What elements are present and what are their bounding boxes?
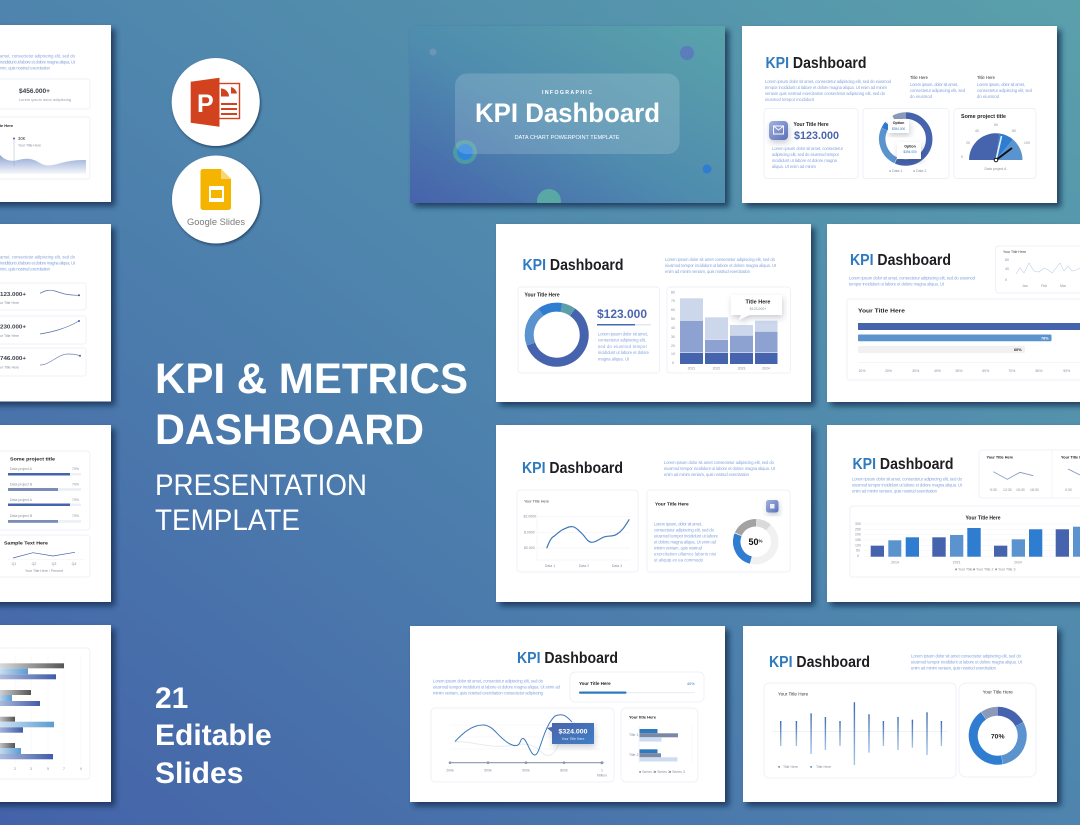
card: horizontal bars: ■ Series 2 xyxy=(654,770,670,774)
card: gradient bar chart: 9 xyxy=(80,767,82,771)
slide: KPI dashboard with gauge xyxy=(742,26,1057,203)
slide title: KPI Dashboard xyxy=(522,460,623,477)
intro text: eiusmod tempor incididunt ut labore et dolore magna aliqua. Ut enim ad xyxy=(433,684,561,690)
card: 50% donut: exercitation ullamco laboris nisi xyxy=(654,552,716,556)
card: grouped bars: 2014 xyxy=(891,560,899,564)
intro text xyxy=(765,79,892,102)
card: project bars: 70% xyxy=(72,467,79,471)
card: project bars xyxy=(0,451,90,530)
intro text: Lorem ipsum dolor sit amet, consectetur adipiscing elit, sed do xyxy=(852,476,963,482)
slide: curve with tooltip xyxy=(410,626,725,802)
card: donut: consectetur adipiscing elit, xyxy=(598,338,646,342)
card: sample line chart: Q1 xyxy=(12,562,16,566)
intro text: eiusmod tempor incididunt ut labore et dolore magna aliqua. Ut xyxy=(665,263,777,268)
card: grouped bars: 200 xyxy=(855,533,861,537)
card: gradient bar chart: 2 xyxy=(14,767,16,771)
card: 50% donut: consectetur adipiscing elit, sed do xyxy=(654,528,715,532)
intro text: nim, quis nostrud exercitation xyxy=(0,266,51,272)
card: grouped bars: 2024 xyxy=(1014,560,1022,564)
card: line chart: Data 3 xyxy=(612,564,622,568)
chart tooltip: Title Here xyxy=(746,300,770,306)
slide: vertical bars and 70% donut xyxy=(743,626,1057,802)
intro text: enim ad minim veniam, quis nostrud exercitation xyxy=(664,472,750,477)
card: stacked bar chart: 50 xyxy=(671,317,675,321)
card: stacked bar chart: 60 xyxy=(671,308,675,312)
card: area curves: 800k xyxy=(560,768,568,772)
card: 50% donut xyxy=(647,490,790,572)
tooltip: Your Title Here xyxy=(561,737,585,741)
slide: left column project progress xyxy=(0,425,111,602)
column notes: Lorem ipsum, dolor sit amet, xyxy=(977,82,1025,87)
card: grouped bars: 0 xyxy=(857,554,859,558)
tooltip xyxy=(547,723,594,744)
intro text: amet, consectetur adipiscing elit, sed do xyxy=(0,54,76,58)
card: sample line chart: Your Title Here / Percent xyxy=(25,569,63,573)
card: gauge xyxy=(954,108,1036,178)
card: 70% donut xyxy=(959,683,1036,777)
mini line chart card: 80 xyxy=(1005,258,1009,262)
card: value with icon: aliqua. Ut enim ad minim xyxy=(772,164,816,169)
card: grouped bars: 300 xyxy=(855,522,861,526)
card: gradient bar chart xyxy=(0,648,90,779)
card: area curves: 500k xyxy=(484,768,492,772)
intro text: minim veniam, quis nostrud exercitation consectetur adipiscing xyxy=(433,690,544,696)
card: gauge: 20 xyxy=(966,141,970,145)
slide title: KPI Dashboard xyxy=(766,55,866,72)
slide: left column sparklines xyxy=(0,224,111,402)
intro text: Lorem ipsum dolor sit amet, consectetur adipiscing elit, sed do eiusmod xyxy=(849,276,976,280)
card: donut with option tooltips: ● Data 1 xyxy=(889,169,902,173)
icon: PowerPoint badge xyxy=(172,58,260,146)
intro text xyxy=(433,678,561,696)
intro text: incididunt ut labore et dolore magna aliqua. Ut xyxy=(0,260,76,266)
card: project bars: Data project B xyxy=(10,482,33,486)
column notes: Lorem ipsum, dolor sit amet, xyxy=(910,82,958,87)
KPI row 3: 746.000+ xyxy=(0,356,27,362)
card: gauge: 0 xyxy=(961,155,963,159)
icon: Google Slides badge: Google Slides xyxy=(187,217,245,228)
card: grouped bars xyxy=(850,506,1080,577)
card: 50% donut: 50 xyxy=(748,537,758,547)
card: grouped bars: 150 xyxy=(855,538,861,542)
heading: KPI & Metrics Dashboard: DASHBOARD xyxy=(155,406,424,454)
intro text xyxy=(911,654,1023,670)
card: progress bars: 80% xyxy=(1035,369,1043,373)
card: sample line chart: Sample Text Here xyxy=(4,540,48,546)
mini line chart card: Your Title Here xyxy=(1003,250,1026,254)
intro text: tempor incididunt ut labore et dolore magna aliqua. Ut xyxy=(849,282,945,286)
slide title: KPI Dashboard xyxy=(517,650,618,667)
mini line chart card: Mar xyxy=(1060,284,1067,288)
mini line chart card: Feb xyxy=(1041,284,1047,288)
card: wave chart: Your Title Here xyxy=(18,144,41,148)
card: vertical range bars: Title Here xyxy=(783,765,798,769)
card: vertical range bars xyxy=(764,683,956,778)
card: area curves xyxy=(431,708,614,782)
card: wave chart xyxy=(0,117,90,179)
intro text: eiusmod tempor incididunt ut labore et dolore magna aliqua. Ut xyxy=(852,482,963,488)
card: progress: 40% xyxy=(687,682,695,686)
KPI row 3 xyxy=(0,348,86,376)
card: stacked bar chart: 30 xyxy=(671,335,675,339)
column notes: do eiusmod xyxy=(910,94,933,99)
column notes: consectetur adipiscing elit, sed xyxy=(977,88,1033,93)
intro text: amet, consectetur adipiscing elit, sed do xyxy=(0,254,76,260)
card: area curves: 200k xyxy=(446,768,454,772)
cover title: INFOGRAPHIC xyxy=(542,90,592,96)
card: grouped bars: ■ Your Title 3 xyxy=(995,568,1015,572)
cover title: KPI Dashboard xyxy=(475,98,660,128)
card: donut with option tooltips: Option xyxy=(893,121,904,125)
card: donut with option tooltips xyxy=(863,107,949,178)
card: stacked bar chart: 2023 xyxy=(738,366,745,370)
card: donut: $123.000 xyxy=(597,307,647,321)
card: progress bars: 30% xyxy=(912,369,919,373)
card: grouped bars: Your Title Here xyxy=(965,516,1001,522)
mini line chart cards: 12:30 xyxy=(1003,488,1012,492)
icon: PowerPoint badge: P xyxy=(197,90,214,118)
subheading: presentation template: TEMPLATE xyxy=(155,504,300,537)
card: horizontal bars xyxy=(621,708,698,782)
card: grouped bars: ■ Your Title xyxy=(955,568,973,572)
column notes: do eiusmod xyxy=(977,94,1000,99)
mini line chart cards: Your Title Here xyxy=(986,456,1013,460)
card: line chart xyxy=(517,490,638,572)
card: line chart: Data 2 xyxy=(579,564,589,568)
subheading: presentation template: PRESENTATION xyxy=(155,469,367,502)
card: progress: Your Title Here xyxy=(579,681,611,686)
card: value with icon xyxy=(764,108,858,178)
slide title: KPI Dashboard xyxy=(852,456,954,473)
intro text xyxy=(0,254,76,272)
column notes: Title Here xyxy=(977,75,996,80)
intro text: eiusmod tempor incididunt ut labore et dolore magna aliqua. Ut xyxy=(664,466,776,471)
card: gradient bar chart: 7 xyxy=(63,767,65,771)
card: value: $456.000+ xyxy=(19,88,50,95)
slide: line chart and 50% donut xyxy=(496,425,811,602)
card: donut: Your Title Here xyxy=(524,292,560,298)
card: grouped bars: 250 xyxy=(855,527,861,531)
card: stacked bar chart xyxy=(667,287,790,373)
card: value with icon: adipiscing elit, sed do eiusmod tempor xyxy=(772,152,840,157)
card: gauge: 80 xyxy=(1012,129,1016,133)
cover title: DATA CHART POWERPOINT TEMPLATE xyxy=(514,135,620,141)
card: project bars: Data project B xyxy=(10,514,33,518)
chart tooltip xyxy=(731,295,782,320)
slide: donut and stacked bars xyxy=(496,224,811,402)
card: 70% donut: Your Title Here xyxy=(983,690,1013,694)
card: 50% donut: minim veniam, quis nostrud xyxy=(654,546,703,550)
card: progress bars: 70% xyxy=(1008,369,1015,373)
card: donut: Lorem ipsum dolor sit amet, xyxy=(598,332,648,336)
text: 21 editable slides: 21 xyxy=(155,682,188,715)
card: 50% donut: et dolore magna aliqua. Ut enim ad xyxy=(654,540,717,544)
card: project bars: Data project A xyxy=(10,467,33,471)
card: 50% donut: Your Title Here xyxy=(655,502,689,508)
card: donut with option tooltips: Option xyxy=(904,144,916,148)
slide title: KPI Dashboard xyxy=(769,654,870,671)
cover glass panel xyxy=(455,74,680,154)
card: wave chart: 30K xyxy=(18,136,26,141)
intro text xyxy=(664,460,776,477)
card: progress xyxy=(570,672,704,702)
card: gradient bar chart: 5 xyxy=(47,767,49,771)
mini line chart cards: 15:30 xyxy=(1016,488,1025,492)
mini line chart cards: 9:30 xyxy=(1065,488,1072,492)
card: project bars: 70% xyxy=(72,498,79,502)
card: progress bars: 60% xyxy=(1014,348,1022,352)
slide title: KPI Dashboard xyxy=(522,257,624,274)
card: progress bars: 20% xyxy=(885,369,892,373)
card: donut with option tooltips: $394.000 xyxy=(892,127,905,131)
text: 21 editable slides: Editable xyxy=(155,719,272,752)
column notes xyxy=(910,75,1033,99)
intro text: Lorem ipsum dolor sit amet consectetur adipiscing elit, sed do xyxy=(665,257,776,262)
card: progress bars: 10% xyxy=(858,369,866,373)
card: grouped bars: 50 xyxy=(856,549,860,553)
card: 50% donut: Lorem ipsum, dolor sit amet, xyxy=(654,522,702,526)
card: donut xyxy=(518,287,660,373)
card: progress bars xyxy=(847,299,1080,380)
mini line chart cards: 9:30 xyxy=(990,488,997,492)
card: gauge: 100 xyxy=(1024,141,1030,145)
card: donut with option tooltips: $394.000 xyxy=(903,150,917,154)
card: stacked bar chart: 80 xyxy=(671,290,675,294)
card: value xyxy=(0,79,90,109)
mini line chart card: Jan xyxy=(1022,284,1028,288)
intro text xyxy=(0,54,76,70)
card: stacked bar chart: 10 xyxy=(671,352,675,356)
column notes: Title Here xyxy=(910,75,929,80)
card: 70% donut: 70% xyxy=(991,734,1005,740)
KPI row 2: 230.000+ xyxy=(0,324,27,330)
intro text: Lorem ipsum dolor sit amet, consectetur adipiscing elit, sed do xyxy=(433,678,544,684)
card: vertical range bars: ■ xyxy=(778,765,780,769)
icon: plus tile xyxy=(766,500,778,512)
card: vertical range bars: ■ xyxy=(810,765,812,769)
intro text: enim ad minim veniam, quis nostrud exercitation xyxy=(665,269,751,274)
card: area curves: 1 xyxy=(601,768,603,772)
card: sample line chart: Q4 xyxy=(72,562,76,566)
card: progress bars: Your Title Here xyxy=(858,308,906,314)
card: line chart: $.0000 xyxy=(524,530,535,534)
column notes: consectetur adipiscing elit, sed xyxy=(910,88,966,93)
mini line chart card: 0 xyxy=(1005,278,1007,282)
slide: left column revenue and wave xyxy=(0,25,111,202)
card: vertical range bars: Your Title Here xyxy=(778,692,809,696)
card: donut with option tooltips: ● Data 2 xyxy=(913,169,926,173)
slide: cover xyxy=(410,26,725,213)
card: project bars: 70% xyxy=(72,482,79,486)
card: sample line chart: Q3 xyxy=(52,562,56,566)
slide: grouped bar chart xyxy=(827,425,1080,602)
card: value: Lorem ipsum dolor adipiscing xyxy=(19,98,71,102)
intro text: eiusmod tempor incididunt xyxy=(765,97,815,102)
card: horizontal bars: ■ Series 1 xyxy=(639,770,655,774)
card: grouped bars: ■ Your Title 2 xyxy=(973,568,993,572)
card: horizontal bars: ■ Series 3 xyxy=(669,770,685,774)
text: 21 editable slides xyxy=(155,682,272,790)
card: line chart: $0.000 xyxy=(524,546,535,550)
intro text xyxy=(852,476,963,494)
KPI row 2 xyxy=(0,316,86,344)
card: horizontal bars: Your title Here xyxy=(629,714,657,720)
card: stacked bar chart: 2021 xyxy=(688,366,695,370)
cover title xyxy=(475,90,660,141)
card: progress bars: 40% xyxy=(934,369,941,373)
heading: KPI & Metrics Dashboard xyxy=(155,355,468,454)
tooltip: $324.000 xyxy=(558,728,588,736)
card: horizontal bars: Title 2 xyxy=(629,753,638,757)
card: horizontal bars: Title 1 xyxy=(629,733,638,737)
card: 50% donut: eiusmod tempor incididunt ut labore xyxy=(654,534,719,538)
card: sample line chart xyxy=(0,535,90,577)
heading: KPI & Metrics Dashboard: KPI & METRICS xyxy=(155,355,468,403)
intro text: enim ad minim veniam, quis nostrud exercitation xyxy=(911,666,997,670)
text: 21 editable slides: Slides xyxy=(155,757,243,790)
card: line chart: Data 1 xyxy=(545,564,555,568)
card: stacked bar chart: 70 xyxy=(671,299,675,303)
card: grouped bars: 100 xyxy=(855,543,861,547)
card: donut: sed do eiusmod tempor xyxy=(598,344,648,349)
intro text: Lorem ipsum dolor sit amet consectetur adipiscing elit, sed do xyxy=(664,460,775,465)
mini line chart cards xyxy=(979,450,1080,498)
mini line chart cards: 18:30 xyxy=(1030,488,1039,492)
subheading: presentation template xyxy=(155,469,367,537)
slide: left column horizontal gradient bars xyxy=(0,625,111,802)
card: stacked bar chart: 0 xyxy=(672,361,674,365)
card: progress bars: 50% xyxy=(955,369,963,373)
mini line chart card xyxy=(996,246,1080,293)
KPI row 1: 123.000+ xyxy=(0,292,27,298)
card: gauge: 40 xyxy=(975,129,979,133)
intro text: eiusmod tempor incididunt ut labore et dolore magna aliqua. Ut xyxy=(911,660,1023,664)
card: grouped bars: 2021 xyxy=(953,560,961,564)
card: line chart: Your Title Here xyxy=(524,500,549,504)
card: project bars: 70% xyxy=(72,514,79,518)
card: gauge: 60 xyxy=(994,123,998,127)
card: stacked bar chart: 2024 xyxy=(762,366,770,370)
intro text: tempor incididunt ut labore et dolore magna aliqua. Ut enim ad minim xyxy=(765,85,888,90)
chart tooltip: $123.000+ xyxy=(750,307,766,311)
card: stacked bar chart: 40 xyxy=(671,326,675,330)
KPI row 1: ur Title Here xyxy=(0,301,19,305)
card: line chart: $2.0000 xyxy=(524,514,536,518)
card: gradient bar chart: 3 xyxy=(30,767,32,771)
card: value with icon: incididunt ut labore et dolore magna xyxy=(772,158,838,163)
mini line chart card: 40 xyxy=(1005,267,1009,271)
card: value with icon: $123.000 xyxy=(794,130,839,142)
card: project bars: Data project A xyxy=(10,498,33,502)
cover decorative circles xyxy=(430,46,712,213)
KPI row 1 xyxy=(0,283,86,310)
card: progress bars: 60% xyxy=(982,369,989,373)
intro text: Lorem ipsum dolor sit amet consectetur adipiscing elit, sed do xyxy=(911,654,1022,658)
card: progress bars: 78% xyxy=(1041,336,1049,340)
card: project bars: Some project title xyxy=(10,456,55,462)
card: 50% donut: ut aliquip ex ea commodo xyxy=(654,558,704,562)
KPI row 2: ur Title Here xyxy=(0,334,19,338)
card: gauge: Data project A xyxy=(985,167,1007,171)
card: area curves: Million xyxy=(597,774,607,778)
card: gauge: Some project title xyxy=(961,114,1006,120)
card: area curves: 500k xyxy=(522,768,530,772)
card: stacked bar chart: 20 xyxy=(671,344,675,348)
KPI row 3: ur Title Here xyxy=(0,366,19,370)
card: 50% donut: % xyxy=(758,538,763,544)
intro text xyxy=(849,276,976,286)
intro text: enim ad minim veniam, quis nostrud exercitation xyxy=(852,488,938,494)
slide: horizontal progress bars xyxy=(827,224,1080,402)
card: stacked bar chart: 2022 xyxy=(713,366,720,370)
intro text: nim, quis nostrud exercitation xyxy=(0,66,51,70)
card: donut: magna aliqua. Ut xyxy=(598,356,630,362)
card: value with icon: Lorem ipsum dolor sit amet, consectetur xyxy=(772,146,844,151)
intro text: Lorem ipsum dolor sit amet, consectetur adipiscing elit, sed do eiusmod xyxy=(765,79,892,84)
card: progress bars: 90% xyxy=(1063,369,1070,373)
card: sample line chart: Q2 xyxy=(32,562,36,566)
intro text xyxy=(665,257,777,274)
slide title: KPI Dashboard xyxy=(850,252,951,269)
icon: Google Slides badge xyxy=(172,156,260,244)
card: donut: incididunt ut labore et dolore xyxy=(598,350,650,355)
intro text: veniam quis nostrud exercitation consectetur adipiscing elit, sed do xyxy=(765,91,886,96)
card: value with icon: Your Title Here xyxy=(794,122,829,128)
card: vertical range bars: Title Here xyxy=(816,765,831,769)
intro text: incididunt ut labore et dolore magna aliqua. Ut xyxy=(0,60,76,64)
